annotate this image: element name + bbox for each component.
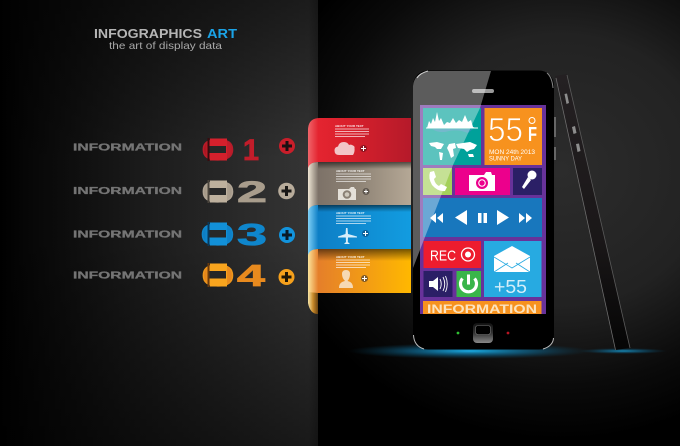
tile: record: REC xyxy=(430,248,456,264)
tile: weather: F xyxy=(528,124,537,146)
tile: phone xyxy=(423,168,452,195)
ribbon band: blue: ABOUT YOUR TEXT xyxy=(336,211,365,215)
glow under phone xyxy=(348,343,592,359)
row 4: label, number and plus button: 4 xyxy=(237,258,266,293)
row 3: label, number and plus button: 3 xyxy=(237,217,267,252)
title: the art of display data xyxy=(109,40,222,52)
tile: mail xyxy=(484,241,542,297)
row 2: label, number and plus button: INFORMATION xyxy=(73,186,182,197)
tile: weather: SUNNY DAY xyxy=(489,156,522,162)
phone edge highlights xyxy=(414,71,554,349)
row 3: label, number and plus button xyxy=(73,217,295,252)
ribbon band: red: ABOUT YOUR TEXT xyxy=(335,124,364,128)
tile: information bar xyxy=(423,301,542,316)
phone side view xyxy=(555,74,630,350)
row 1: label, number and plus button: 1 xyxy=(243,134,259,167)
tile: weather: 55 xyxy=(488,111,523,148)
icon: cloud xyxy=(334,142,355,155)
ribbon curl xyxy=(308,292,318,314)
waveform xyxy=(427,112,476,128)
row 2: label, number and plus button xyxy=(73,176,295,209)
title: INFOGRAPHICS xyxy=(94,27,202,41)
row 2: label, number and plus button: 0 xyxy=(201,176,235,209)
ribbon band: gray xyxy=(308,162,411,211)
title xyxy=(94,27,237,52)
screen xyxy=(420,105,546,316)
tile: weather: MON 24th 2013 xyxy=(489,150,536,156)
earpiece xyxy=(472,89,494,93)
ribbon band: orange: ABOUT YOUR TEXT xyxy=(336,255,365,259)
ribbon band: blue xyxy=(308,205,411,255)
row 1: label, number and plus button: INFORMATION xyxy=(73,142,182,154)
row 4: label, number and plus button xyxy=(73,258,294,293)
tile: record xyxy=(424,241,481,268)
tile: volume xyxy=(424,271,452,297)
phone xyxy=(413,70,556,350)
title: ART xyxy=(207,27,237,41)
row 3: label, number and plus button: INFORMATION xyxy=(73,230,182,240)
tile: microphone xyxy=(513,168,542,195)
row 4: label, number and plus button: 0 xyxy=(201,258,235,293)
ribbon band: gray: ABOUT YOUR TEXT xyxy=(336,169,365,173)
icon: person xyxy=(339,270,353,288)
row 1: label, number and plus button: 0 xyxy=(201,134,235,167)
tile: mail: +55 xyxy=(494,277,527,297)
tile: weather xyxy=(484,108,542,165)
ribbon band: orange xyxy=(308,249,411,293)
status LEDs xyxy=(457,332,509,334)
ribbon band: red xyxy=(308,118,411,168)
world map xyxy=(429,142,477,160)
side buttons xyxy=(564,94,580,152)
row 1: label, number and plus button xyxy=(73,134,295,167)
screen glare xyxy=(413,71,491,268)
home button xyxy=(473,323,493,343)
row 2: label, number and plus button: 2 xyxy=(237,176,267,209)
icon: camera xyxy=(338,187,356,200)
tile: camera xyxy=(455,168,510,195)
row 3: label, number and plus button: 0 xyxy=(200,217,235,252)
row 4: label, number and plus button: INFORMATION xyxy=(73,270,182,282)
tile: information bar: INFORMATION xyxy=(427,302,537,316)
background: left panel xyxy=(0,0,318,446)
background: right panel xyxy=(318,0,680,446)
tile: media controls xyxy=(423,198,542,237)
glow under side phone xyxy=(579,348,667,354)
tile: chart and world map xyxy=(423,108,481,165)
phone volume buttons xyxy=(554,117,556,160)
tile: power xyxy=(456,271,481,297)
panel: folded ribbon xyxy=(308,118,411,314)
icon: airplane xyxy=(338,228,357,244)
phone body xyxy=(413,70,554,350)
